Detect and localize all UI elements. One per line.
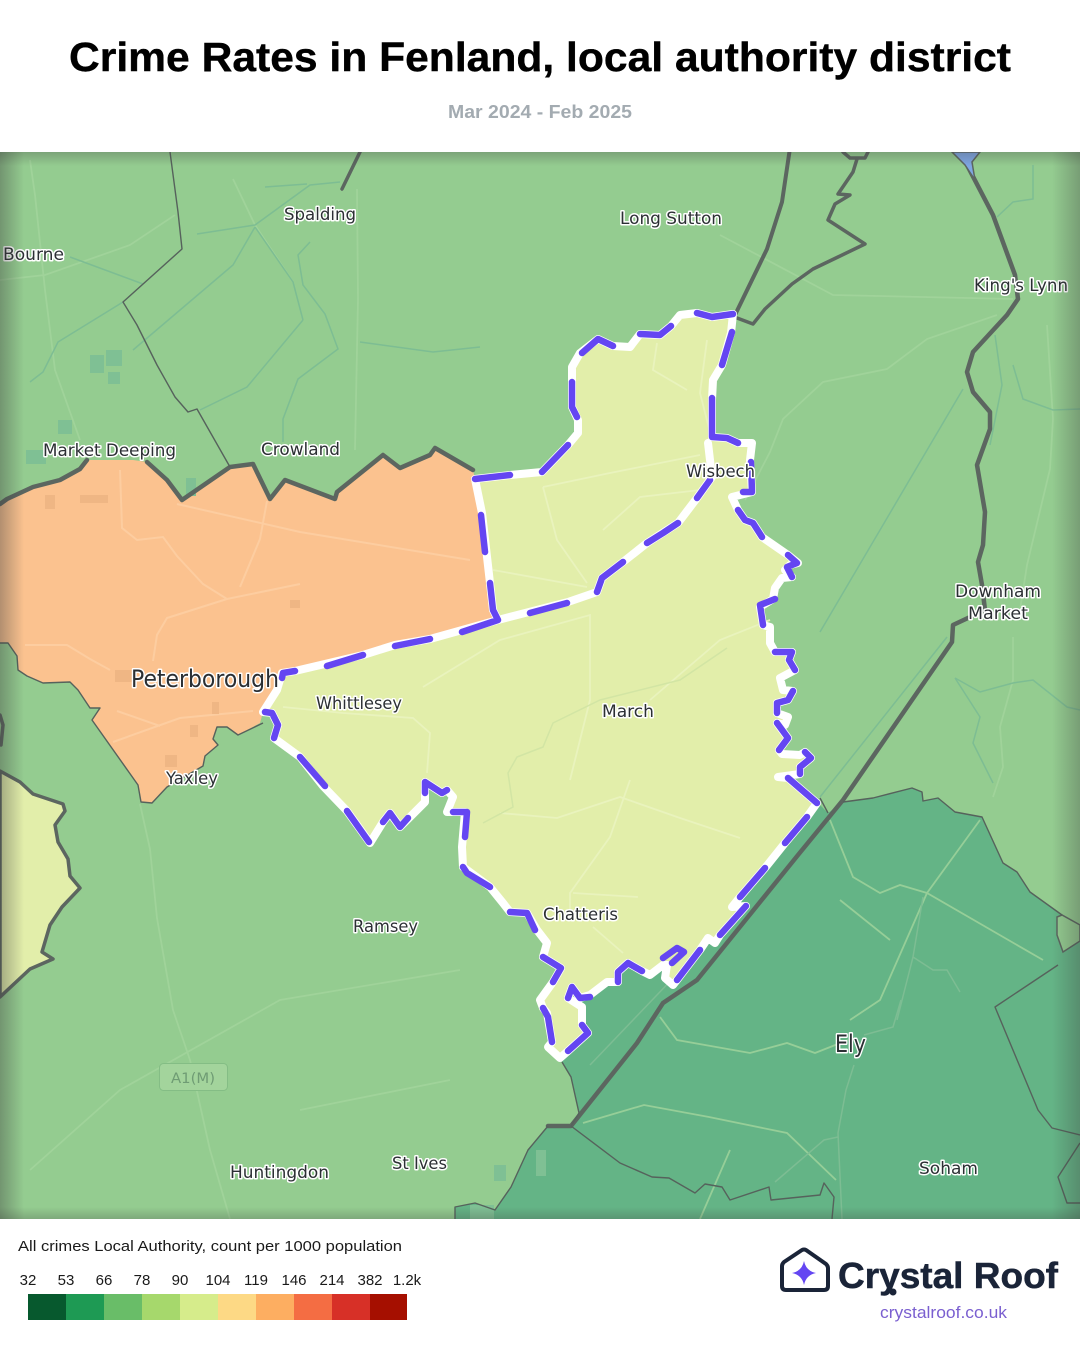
label: Ely: Ely [835,1030,866,1058]
region: Ely / East Cambridgeshire (dark green) [455,788,1080,1220]
wordmark: Crystal Roof [838,1255,1059,1296]
icon: house with star [782,1250,828,1290]
legend scale numbers: 32 [20,1272,36,1289]
label: Ramsey: Ramsey [353,917,418,937]
rivers: thin darker lines [30,165,1080,1219]
brand logo [782,1250,1059,1322]
map base: surrounding districts [0,152,1080,1219]
legend [18,1238,422,1320]
label: Peterborough: Peterborough [131,665,279,693]
legend scale numbers: 66 [96,1272,112,1289]
map edge shading [0,152,1080,1219]
legend title: All crimes Local Authority, count per 1000 population [18,1238,402,1255]
region: small light district at east edge [1057,915,1080,952]
boundary: river Ouse to King's Lynn and Ely [548,165,1018,1126]
label: Long Sutton: Long Sutton [620,209,722,229]
thin boundary lines [0,152,1080,1219]
boundary: small piece at left edge [0,715,3,745]
legend scale numbers: 78 [134,1272,150,1289]
boundary: zig-zag north-east [737,152,868,324]
label: Whittlesey: Whittlesey [316,694,402,714]
title: Crime Rates in Fenland, local authority district [69,34,1011,80]
label: Downham: Downham [955,582,1041,602]
legend scale numbers: 382 [357,1272,383,1289]
boundary: Peterborough top edge [0,448,473,504]
water: Wash estuary [952,152,980,180]
urban patches in Peterborough [45,495,300,767]
region: western district (pale yellow-green) [0,771,80,997]
region: Peterborough (orange) [0,448,498,803]
legend scale numbers: 90 [172,1272,188,1289]
thick boundary lines [0,148,1018,1126]
label: St Ives: St Ives [392,1154,447,1174]
road badge: A1(M) [160,1064,228,1090]
label: Crowland: Crowland [261,440,340,460]
label: King's Lynn: King's Lynn [974,276,1068,296]
map panel [0,148,1080,1220]
subtitle: date range: Mar 2024 - Feb 2025 [448,102,632,122]
legend scale numbers: 146 [281,1272,307,1289]
wordmark key detail [890,1288,896,1296]
label: Spalding: Spalding [284,205,356,225]
boundary: north spur to Fenland top [735,148,790,315]
faint roads within Fenland [283,340,770,953]
region: Fenland district fill [263,313,817,1058]
legend scale numbers: 1.2k [393,1272,422,1289]
legend scale numbers: 214 [319,1272,345,1289]
roads inside Peterborough [25,470,470,742]
label: Huntingdon: Huntingdon [230,1163,329,1183]
label: Market: Market [968,604,1028,624]
legend scale numbers: 104 [205,1272,231,1289]
road badge: A1(M): A1(M) [171,1071,215,1087]
label: Wisbech: Wisbech [686,462,755,482]
boundary: Spalding stub [342,152,360,189]
legend scale numbers: 53 [58,1272,74,1289]
label: Bourne: Bourne [3,245,64,265]
label: Chatteris: Chatteris [543,905,618,925]
urban patches on green areas [26,350,546,1219]
place labels [3,205,1068,1183]
Fenland boundary: white outline [263,313,817,1058]
faint rivers within Fenland [483,648,727,823]
label: Market Deeping: Market Deeping [43,441,176,461]
roads: faint light lines [0,160,1053,1219]
legend scale numbers: 119 [244,1272,268,1289]
label: Soham: Soham [919,1159,978,1179]
label: March: March [602,702,654,722]
legend colour ramp [28,1294,407,1320]
Fenland boundary: purple dashes [265,313,817,1051]
label: Yaxley: Yaxley [165,769,218,789]
website url: crystalroof.co.uk [880,1304,1008,1322]
legend scale numbers [20,1272,422,1289]
